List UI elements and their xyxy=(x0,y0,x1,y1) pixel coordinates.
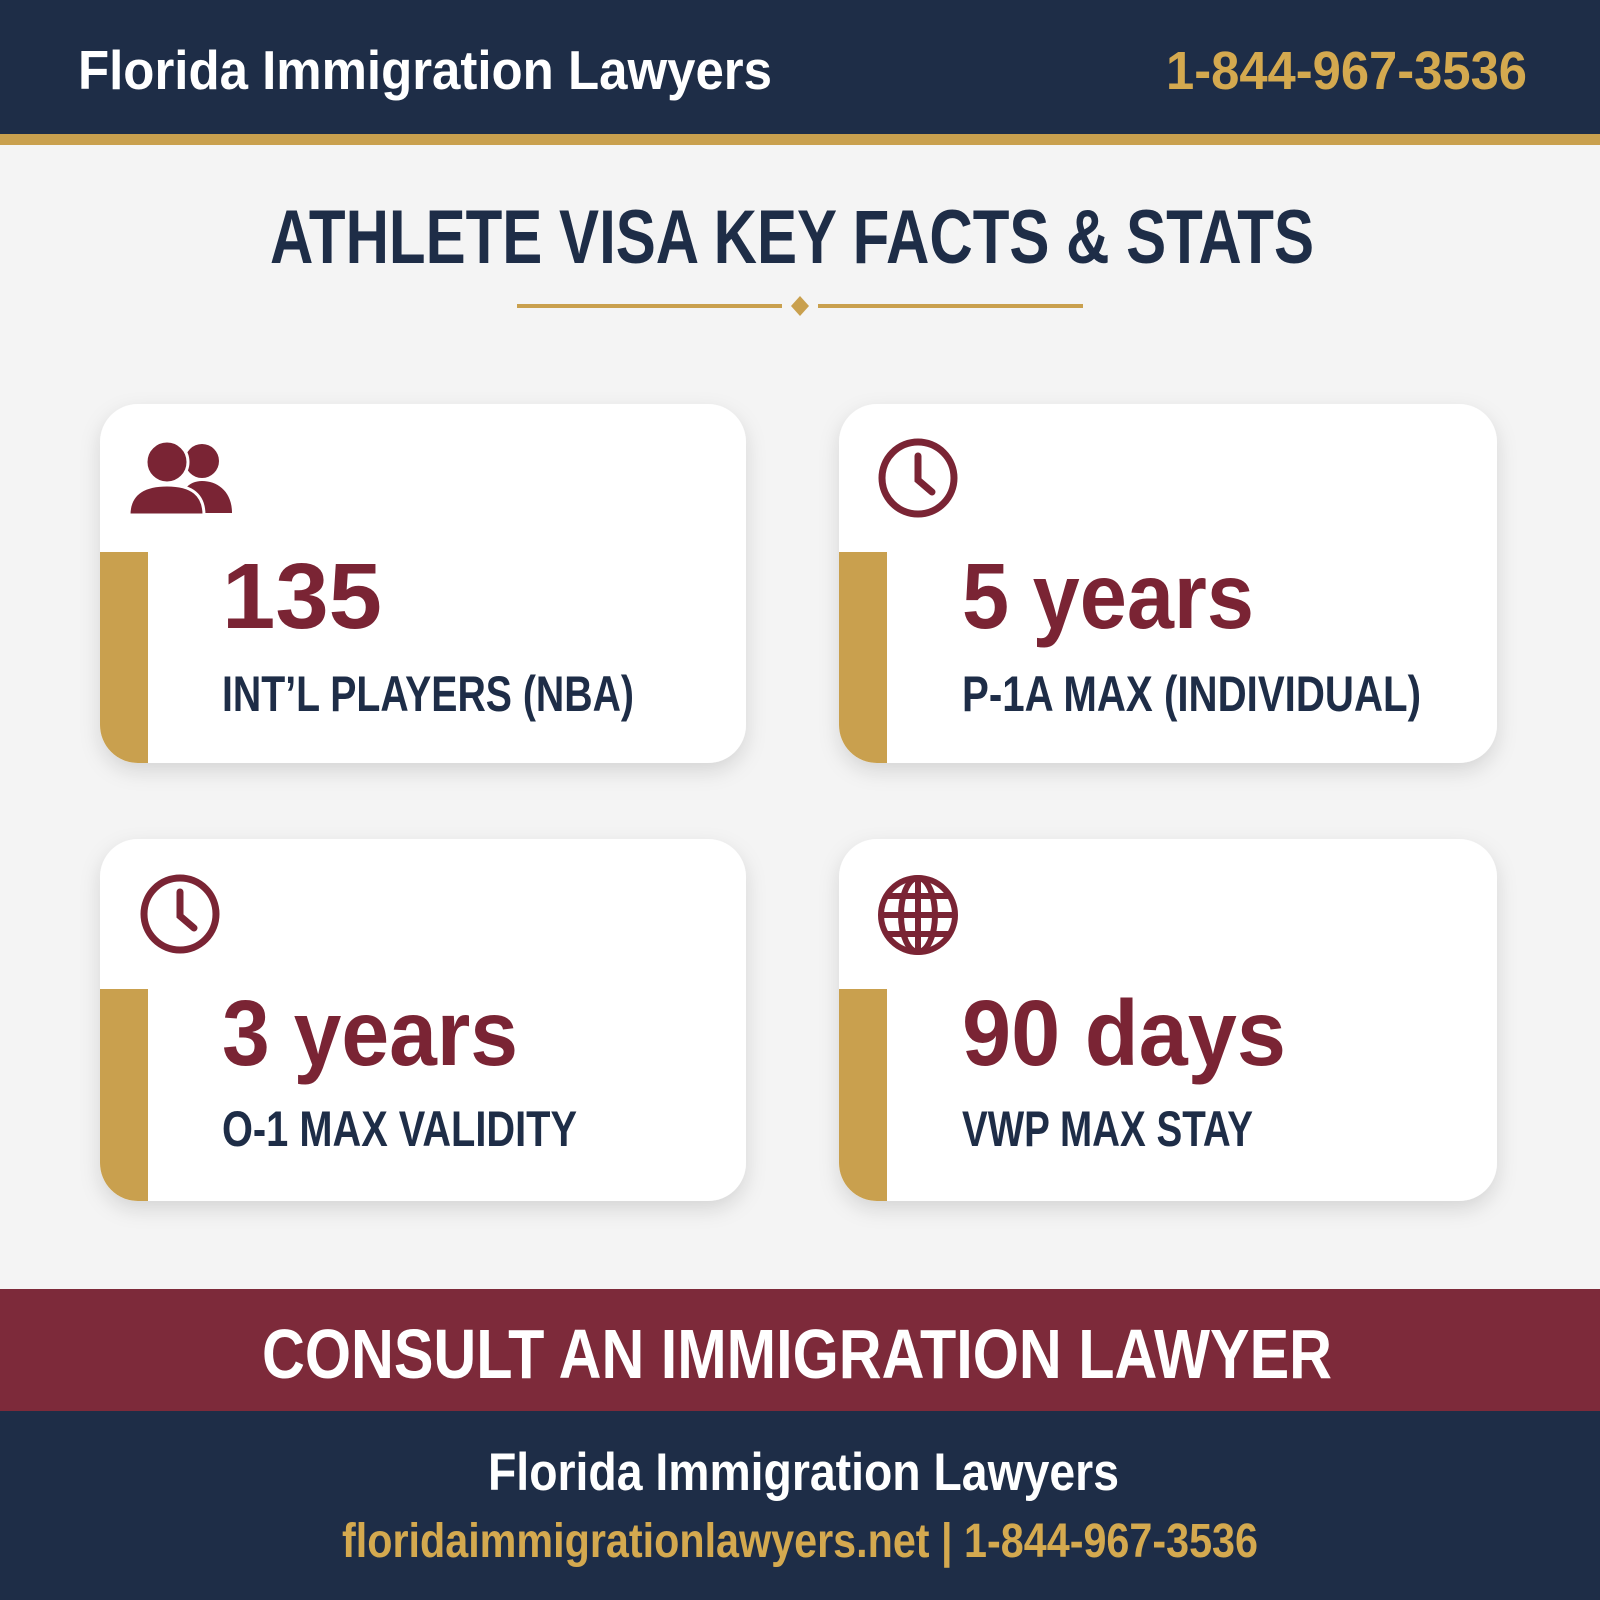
stat number: 5 years xyxy=(962,544,1254,648)
title: ATHLETE VISA KEY FACTS & STATS xyxy=(270,195,1314,280)
stat number: 90 days xyxy=(962,981,1286,1085)
stat label: INT’L PLAYERS (NBA) xyxy=(222,666,634,722)
stat number: 135 xyxy=(222,544,382,648)
icon: clock xyxy=(144,878,216,950)
footer contact line: floridaimmigrationlawyers.net | 1-844-967-3536 xyxy=(342,1515,1258,1568)
stat label: VWP MAX STAY xyxy=(962,1101,1253,1157)
cta banner: CONSULT AN IMMIGRATION LAWYER xyxy=(262,1315,1332,1393)
header brand name: Florida Immigration Lawyers xyxy=(78,39,772,101)
icon: clock xyxy=(882,442,954,514)
card: 3 years O-1 xyxy=(100,839,746,1201)
title divider xyxy=(517,296,1083,316)
card: 135 NBA players xyxy=(100,404,746,763)
card: 5 years P-1A xyxy=(839,404,1497,763)
icon: people xyxy=(129,441,232,515)
cta banner xyxy=(0,1289,1600,1411)
stat label: P-1A MAX (INDIVIDUAL) xyxy=(962,666,1421,722)
stat number: 3 years xyxy=(222,981,518,1085)
footer xyxy=(0,1411,1600,1600)
stat label: O-1 MAX VALIDITY xyxy=(222,1101,577,1157)
footer brand name: Florida Immigration Lawyers xyxy=(488,1443,1119,1502)
card: 90 days VWP xyxy=(839,839,1497,1201)
header bar xyxy=(0,0,1600,145)
icon: globe xyxy=(881,878,955,952)
header phone: 1-844-967-3536 xyxy=(1166,41,1527,101)
